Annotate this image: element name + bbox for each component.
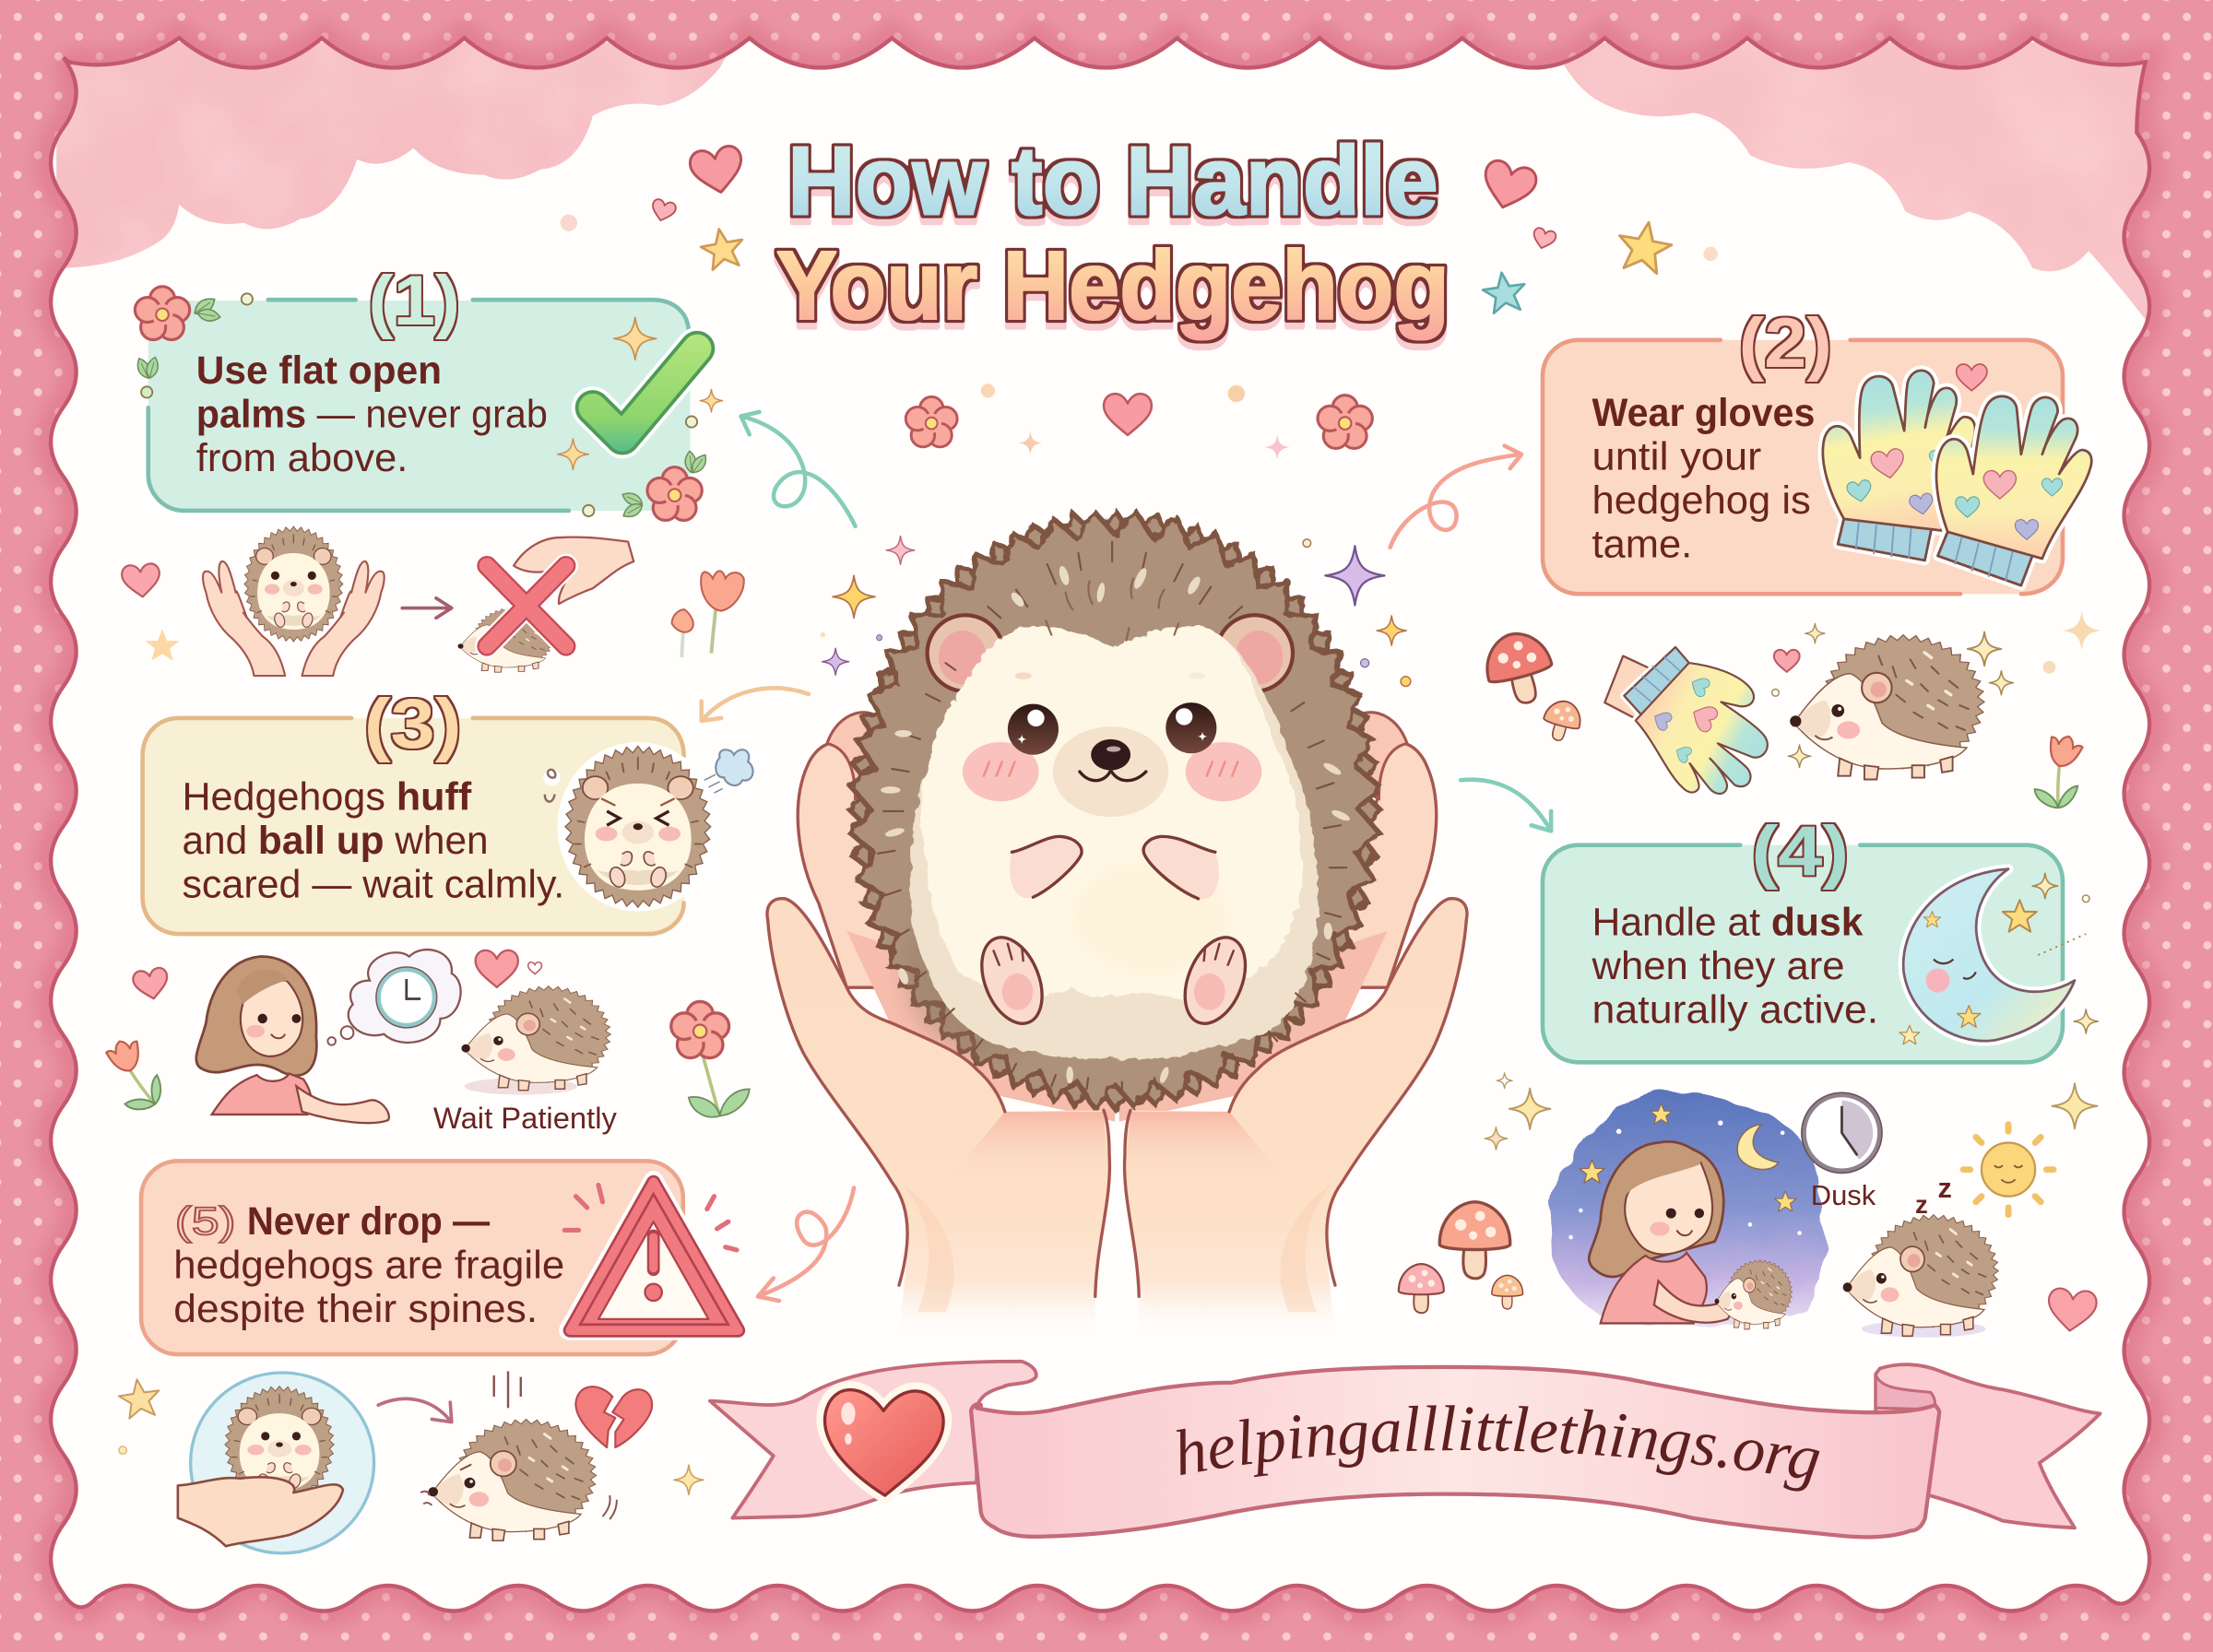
- sleeping z letters: [1915, 1173, 1952, 1219]
- ribbon fold shading: [1876, 1375, 1935, 1410]
- label: dusk: Dusk: [1811, 1180, 1876, 1211]
- panel 3: huff and ball up: [143, 685, 753, 934]
- panel 4 number: (4): [1751, 812, 1849, 891]
- panel 3 text: Hedgehogs huff: [182, 774, 472, 819]
- panel 2 text: tame.: [1592, 522, 1692, 566]
- gloved hand: [1599, 635, 1790, 815]
- title decorations: [561, 144, 1718, 314]
- title: How to Handle: [787, 127, 1438, 236]
- icon: clock: [1802, 1092, 1882, 1173]
- arrow: to panel 1: [741, 412, 856, 526]
- panel 3 text: and ball up when: [182, 819, 489, 863]
- night sky scene with girl and hedgehog: [1550, 1091, 1825, 1329]
- illustration row: wait patiently: [104, 950, 750, 1135]
- panel 4 text: [1592, 901, 1878, 1032]
- cream belly and face: [911, 626, 1319, 1059]
- panel 1: flat open palms: [135, 262, 723, 521]
- center sparkle decorations: [821, 384, 1411, 686]
- title: Your Hedgehog: [776, 231, 1450, 340]
- panel 4 text: naturally active.: [1592, 987, 1878, 1032]
- illustration row: palm hold versus grabbing: [121, 526, 744, 676]
- ears: [928, 615, 1293, 691]
- arrow: [402, 598, 452, 618]
- panel 3 text: scared — wait calmly.: [182, 862, 564, 906]
- panel 5 text: hedgehogs are fragile: [173, 1243, 564, 1287]
- sleeping z letters: z: [1915, 1190, 1928, 1219]
- panel 2 text: Wear gloves: [1592, 391, 1815, 435]
- curved arrow: [378, 1398, 452, 1422]
- panel 4: handle at dusk: [1543, 812, 2098, 1062]
- panel 1 text: [196, 348, 548, 480]
- arrow: to panel 3: [702, 688, 809, 721]
- mushrooms: [1399, 1202, 1523, 1313]
- icon: warning triangle: [569, 1181, 740, 1330]
- panel 1 number: (1): [368, 262, 460, 340]
- arrow: to panel 5: [758, 1188, 854, 1301]
- main illustration: hedgehog held in two hands: [767, 489, 1467, 1333]
- small hedgehog with grabbing hand and red cross: [458, 537, 633, 672]
- protective bubble with hedgehog and hand: [178, 1373, 374, 1553]
- tulip: [2031, 731, 2091, 812]
- left ribbon tail: [710, 1362, 1036, 1518]
- panel 2 number: (2): [1739, 304, 1832, 383]
- ribbon banner: helpingalllittlethings.org: [1177, 1405, 1820, 1492]
- small hands with hedgehog: [203, 526, 385, 676]
- tulip and bud: [672, 571, 744, 657]
- warning burst marks: [564, 1185, 737, 1250]
- panel 2 text: [1592, 391, 1815, 566]
- panel 2 text: until your: [1592, 435, 1761, 479]
- panel 3 text: [182, 774, 564, 906]
- panel 2: wear gloves: [1543, 304, 2091, 594]
- panel 5 text: Never drop —: [247, 1199, 490, 1244]
- icon: sleeping crescent moon: [1899, 869, 2098, 1044]
- illustration row: dusk handling: [1399, 1073, 2098, 1338]
- spine marks: [878, 542, 1346, 1093]
- hearts and sparkles: [1772, 611, 2101, 767]
- panel 4 text: when they are: [1592, 944, 1845, 988]
- sad dropped hedgehog: [420, 1371, 617, 1540]
- standing hedgehog: [1843, 1215, 1998, 1338]
- panel 1 text: from above.: [196, 436, 408, 480]
- hedgehog body with spines: [830, 489, 1401, 1131]
- panel 1 flowers and sparkles: [135, 287, 723, 521]
- sparkles: [1485, 1073, 2097, 1150]
- face: muzzle, cheeks, eyes and nose: [963, 672, 1261, 817]
- panel 2 text: hedgehog is: [1592, 478, 1811, 523]
- main ribbon band: [971, 1367, 1939, 1537]
- panel 4 text: Handle at dusk: [1592, 901, 1864, 945]
- icon: broken heart: [575, 1386, 652, 1447]
- red mushrooms: [1479, 626, 1585, 745]
- icon: pair of gloves: [1812, 362, 2091, 585]
- illustration row: glove meets hedgehog: [1479, 611, 2101, 815]
- icon: green check mark: [593, 348, 697, 437]
- back of hands: [798, 713, 1437, 1122]
- hearts near hedgehog: [476, 950, 542, 987]
- arms: [1010, 836, 1219, 899]
- label: wait patiently: Wait Patiently: [433, 1102, 617, 1135]
- icon: ribbon heart: [822, 1386, 946, 1498]
- arrow: to panel 2: [1391, 446, 1521, 548]
- flower with stem: [671, 1001, 750, 1117]
- arrow: to panel 4: [1461, 780, 1551, 831]
- icon: puff of air: [704, 749, 753, 793]
- icon: angry hedgehog: [543, 742, 718, 912]
- panel 5 text: despite their spines.: [173, 1287, 538, 1331]
- panel 5: never drop: [141, 1161, 740, 1354]
- front palms and thumbs: [767, 899, 1467, 1333]
- right ribbon tail: [1876, 1364, 2101, 1528]
- thought bubble with clock: [327, 950, 461, 1045]
- title: [776, 127, 1450, 340]
- patient hedgehog: [461, 986, 610, 1095]
- girl reaching out: [196, 957, 389, 1123]
- illustration row: drop protection: [117, 1371, 704, 1553]
- panel 5 text: (5): [175, 1199, 236, 1244]
- website text: [1178, 1450, 1820, 1481]
- icon: sleeping sun: [1963, 1125, 2053, 1215]
- panel 5 text: [173, 1199, 564, 1331]
- panel 1 text: palms — never grab: [196, 393, 548, 437]
- feet: [970, 928, 1257, 1032]
- panel 1 text: Use flat open: [196, 348, 442, 393]
- sleeping z letters: z: [1938, 1173, 1952, 1204]
- panel 3 number: (3): [364, 685, 462, 763]
- curious hedgehog: [1790, 635, 1984, 779]
- ribbon banner: [708, 1359, 2102, 1540]
